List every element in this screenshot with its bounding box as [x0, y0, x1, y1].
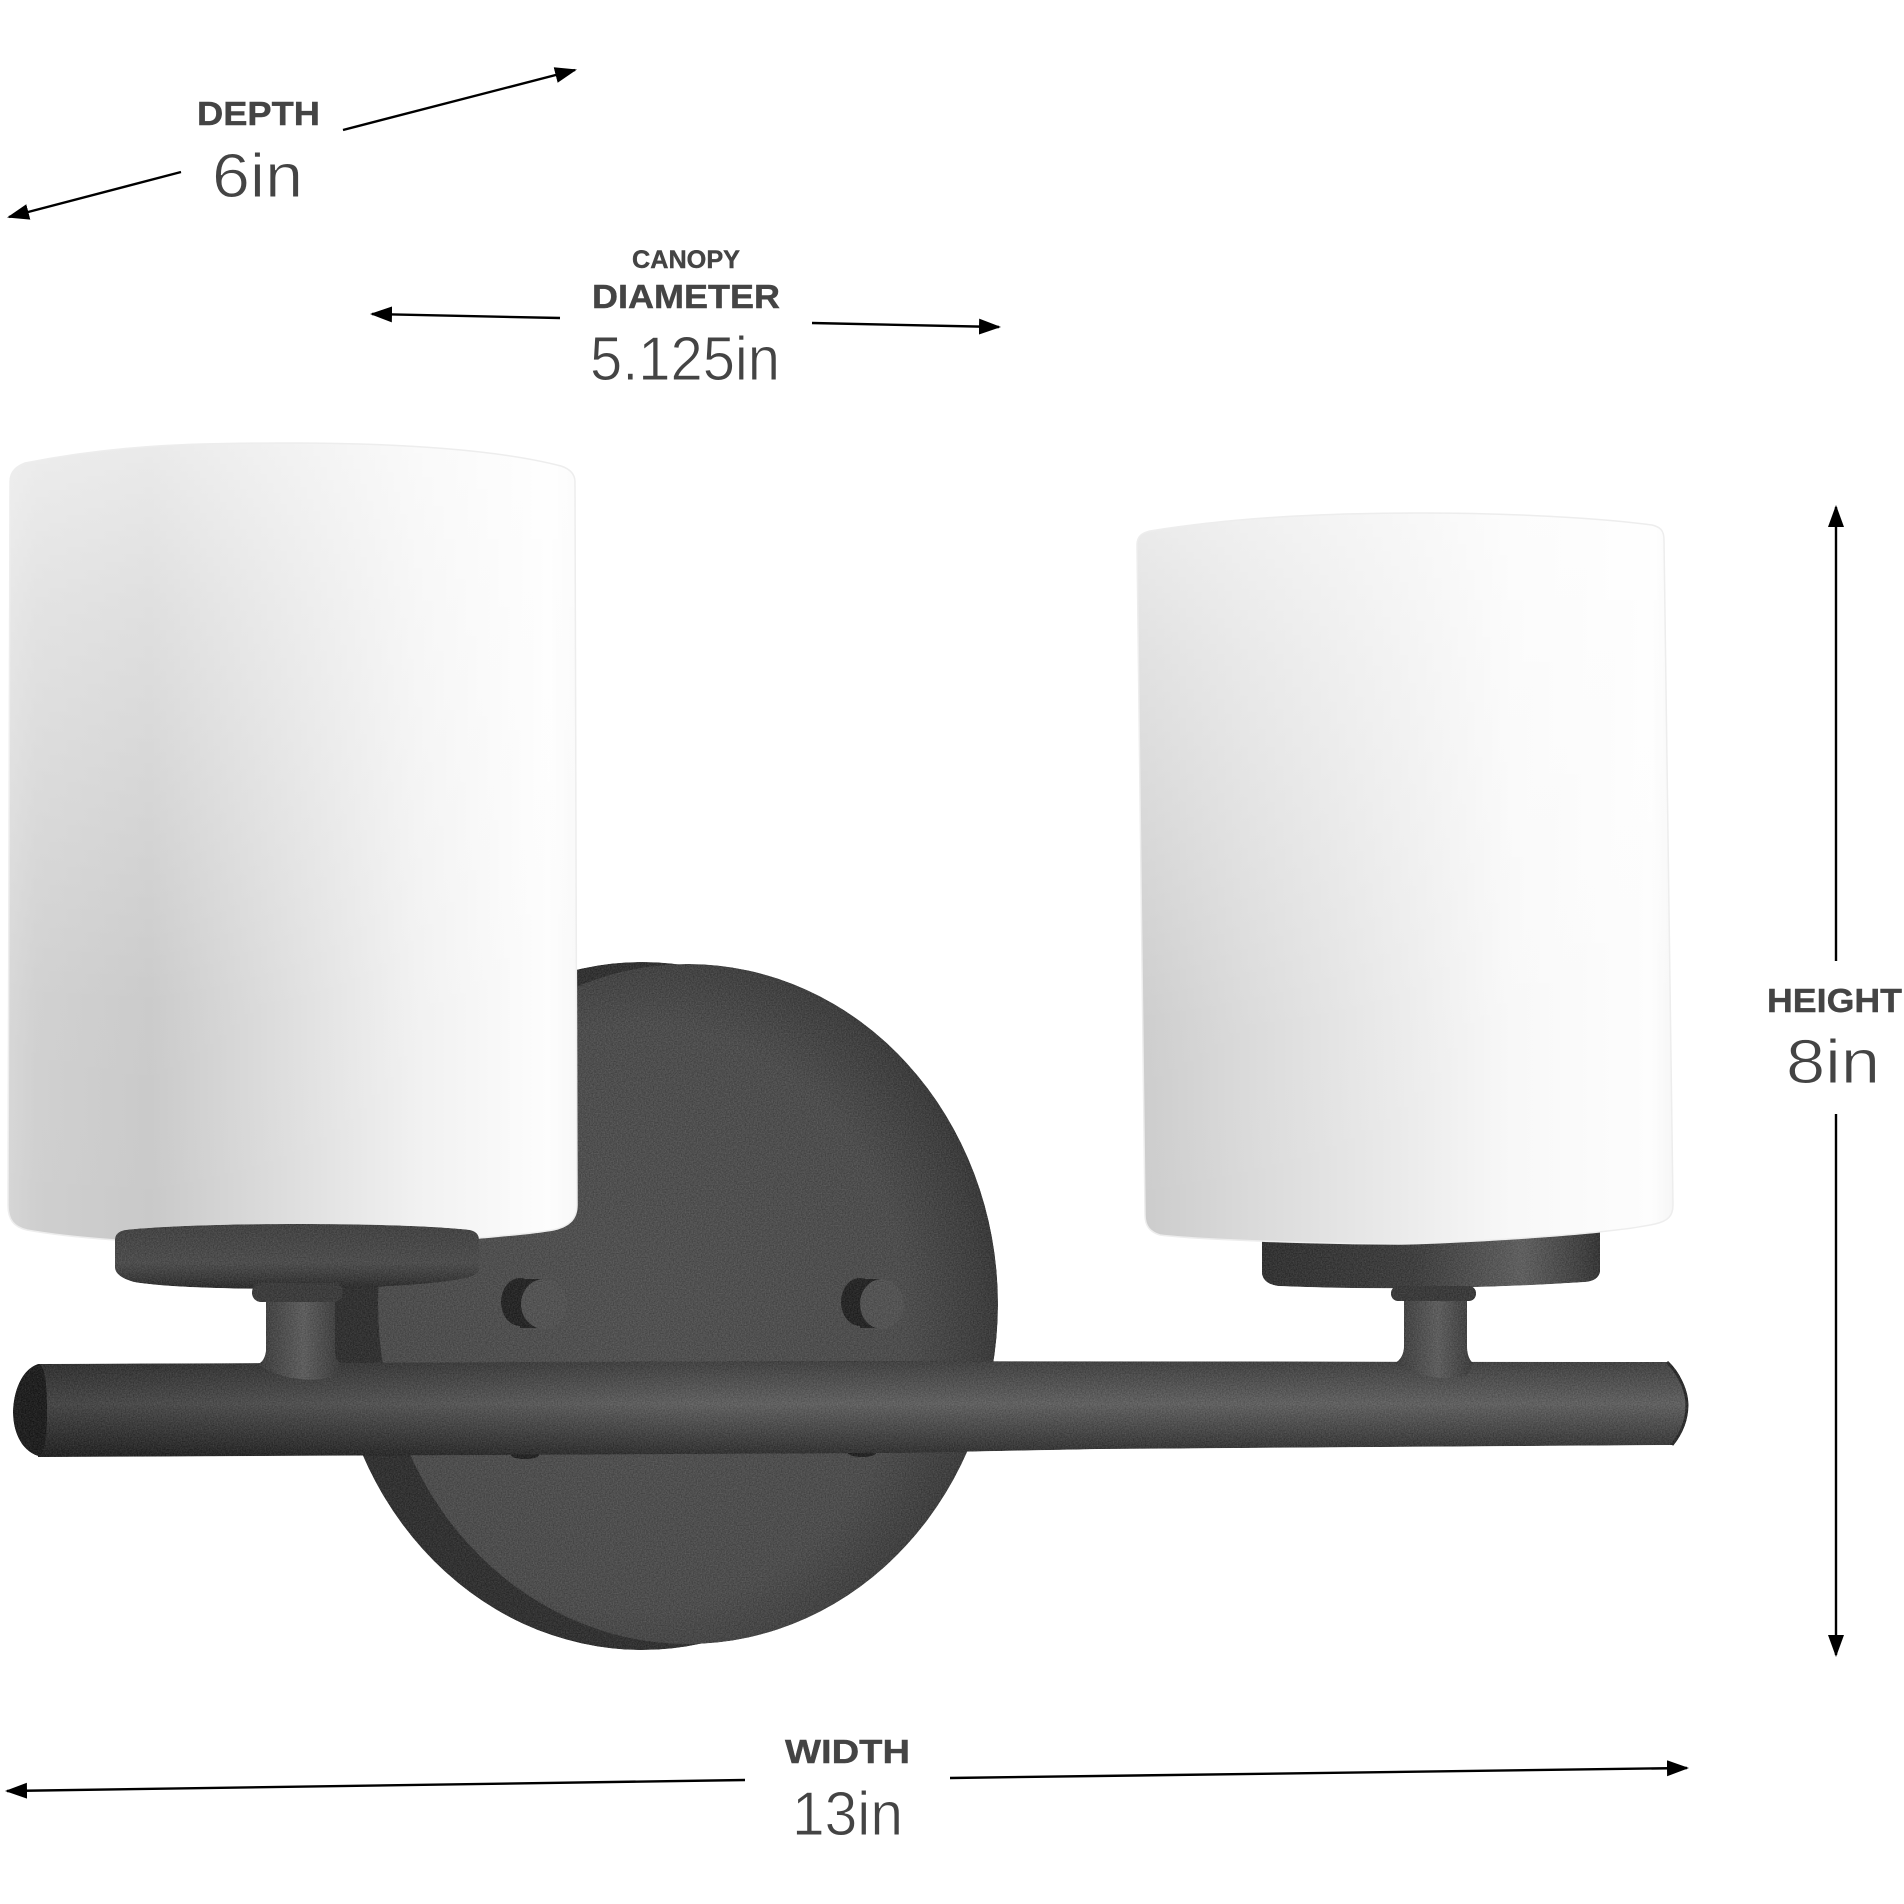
screw ends below bar	[511, 1449, 876, 1459]
left glass shade	[8, 443, 577, 1245]
arm and cups metalwork	[13, 1224, 1687, 1457]
dimension: canopy diameter	[372, 246, 999, 394]
width arrow right	[950, 1768, 1687, 1778]
width label: WIDTH	[785, 1734, 910, 1771]
depth value: 6in	[212, 142, 303, 211]
canopy label: CANOPY	[632, 246, 740, 274]
width value: 13in	[792, 1780, 903, 1849]
canopy arrow left	[372, 314, 560, 318]
left mounting screw	[501, 1278, 567, 1329]
right stem	[1395, 1300, 1473, 1378]
bar left end cap	[13, 1364, 47, 1456]
depth arrow down-left	[9, 172, 181, 217]
left stem	[258, 1300, 341, 1380]
canopy arrow right	[812, 323, 999, 327]
canopy front face	[378, 964, 998, 1644]
right stem collar	[1391, 1286, 1476, 1301]
depth label: DEPTH	[197, 96, 320, 133]
dimension: depth	[9, 70, 575, 217]
right glass shade	[1137, 513, 1673, 1244]
canopy rear rim	[332, 962, 952, 1650]
round wall canopy	[332, 962, 998, 1650]
right lamp cup	[1262, 1225, 1600, 1288]
horizontal bar arm	[38, 1361, 1687, 1457]
diameter value: 5.125in	[590, 325, 780, 394]
height label: HEIGHT	[1767, 983, 1903, 1020]
width arrow left	[7, 1780, 745, 1791]
light fixture	[8, 443, 1687, 1650]
height arrow down	[1835, 1114, 1837, 1655]
right mounting screw	[841, 1278, 904, 1329]
dimension: width	[7, 1734, 1687, 1849]
left stem collar	[252, 1283, 343, 1302]
left lamp cup	[115, 1224, 479, 1289]
height value: 8in	[1786, 1028, 1880, 1097]
diameter label: DIAMETER	[592, 279, 780, 316]
dimension: height	[1767, 507, 1903, 1655]
depth arrow up-right	[343, 70, 575, 130]
bar right end cap	[1667, 1362, 1687, 1445]
height arrow up	[1835, 507, 1837, 961]
